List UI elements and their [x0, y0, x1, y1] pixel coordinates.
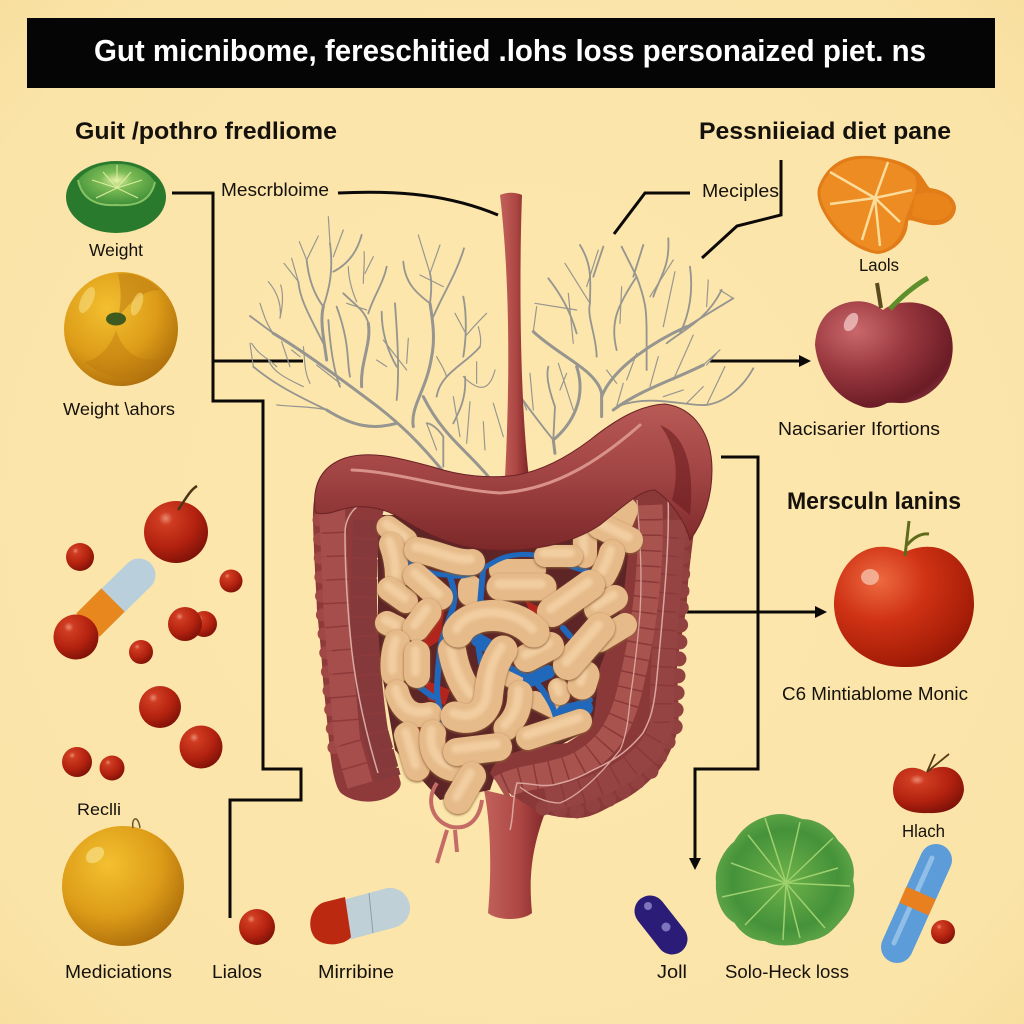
title bar — [27, 18, 995, 88]
label: Joll: Joll — [657, 961, 687, 982]
label: Reclli: Reclli — [77, 800, 121, 819]
icon: large yellow fruit — [62, 819, 184, 946]
icon: dark red apple — [815, 278, 953, 408]
arrowheads — [689, 355, 827, 870]
illustration: blue vessels — [405, 554, 597, 723]
heading: right column: Pessniieiad diet pane — [699, 118, 951, 145]
illustration: appendix — [431, 783, 482, 863]
icon: red and silver capsule — [310, 893, 390, 944]
icon: yellow fruit — [64, 272, 178, 386]
icon: red tomato apple — [834, 521, 974, 667]
icon: green melon slice — [66, 161, 166, 233]
illustration: stomach highlight — [352, 425, 640, 493]
label: Weight lahors: Weight \ahors — [63, 399, 175, 419]
diagram: gut anatomy — [250, 193, 753, 919]
illustration: back loops — [470, 510, 625, 710]
illustration: red patches — [410, 600, 545, 750]
label: Meciples: Meciples — [702, 181, 779, 201]
label: Hlach: Hlach — [902, 821, 945, 841]
illustration: right colon scallops — [542, 540, 684, 811]
icon: cherry and pills group — [54, 486, 242, 780]
icon: small red fruit — [893, 754, 964, 813]
label: Mediciations: Mediciations — [65, 961, 172, 982]
label: Laols: Laols — [859, 255, 899, 275]
illustration: small intestine loops — [386, 523, 630, 800]
icon: tiny red ball — [931, 920, 955, 944]
illustration: right colon folds — [500, 480, 674, 830]
icon: orange slice — [817, 156, 956, 254]
label: Weight: Weight — [89, 240, 143, 260]
illustration: abdominal backing — [378, 515, 640, 800]
illustration: stomach dark fold — [660, 425, 691, 515]
illustration: stomach — [315, 404, 712, 550]
illustration: left vascular tree — [250, 217, 503, 477]
illustration: left colon folds — [332, 503, 388, 785]
label: Nacisarier Ifortions: Nacisarier Ifortions — [778, 419, 940, 439]
connector lines — [172, 160, 824, 918]
label: Solo-Heck loss: Solo-Heck loss — [725, 961, 849, 982]
label: Lialos: Lialos — [212, 961, 262, 982]
icon: purple capsule — [644, 902, 672, 939]
label: C6 Minitiablorne Monic: C6 Mintiablome Monic — [782, 684, 968, 704]
icon: green leaf disc — [717, 815, 853, 944]
illustration: left colon — [313, 458, 401, 802]
illustration: right vascular tree — [522, 238, 753, 453]
title bar: Gut micnibome, fereschitied .lohs loss personaized piet. ns — [94, 33, 926, 68]
illustration: esophagus — [500, 193, 529, 478]
heading: Mersculn lanins: Mersculn lanins — [787, 488, 961, 515]
illustration: left colon scallops — [319, 520, 335, 760]
heading: left column: Guit /pothro fredliome — [75, 118, 337, 145]
icon: blue capsule — [894, 858, 936, 947]
illustration: right colon — [490, 480, 700, 818]
icon: small red ball — [239, 909, 275, 945]
label: Mirribine: Mirribine — [318, 961, 394, 982]
label: Mescrbloime: Mescrbloime — [221, 180, 329, 200]
illustration: rectum — [484, 790, 548, 919]
